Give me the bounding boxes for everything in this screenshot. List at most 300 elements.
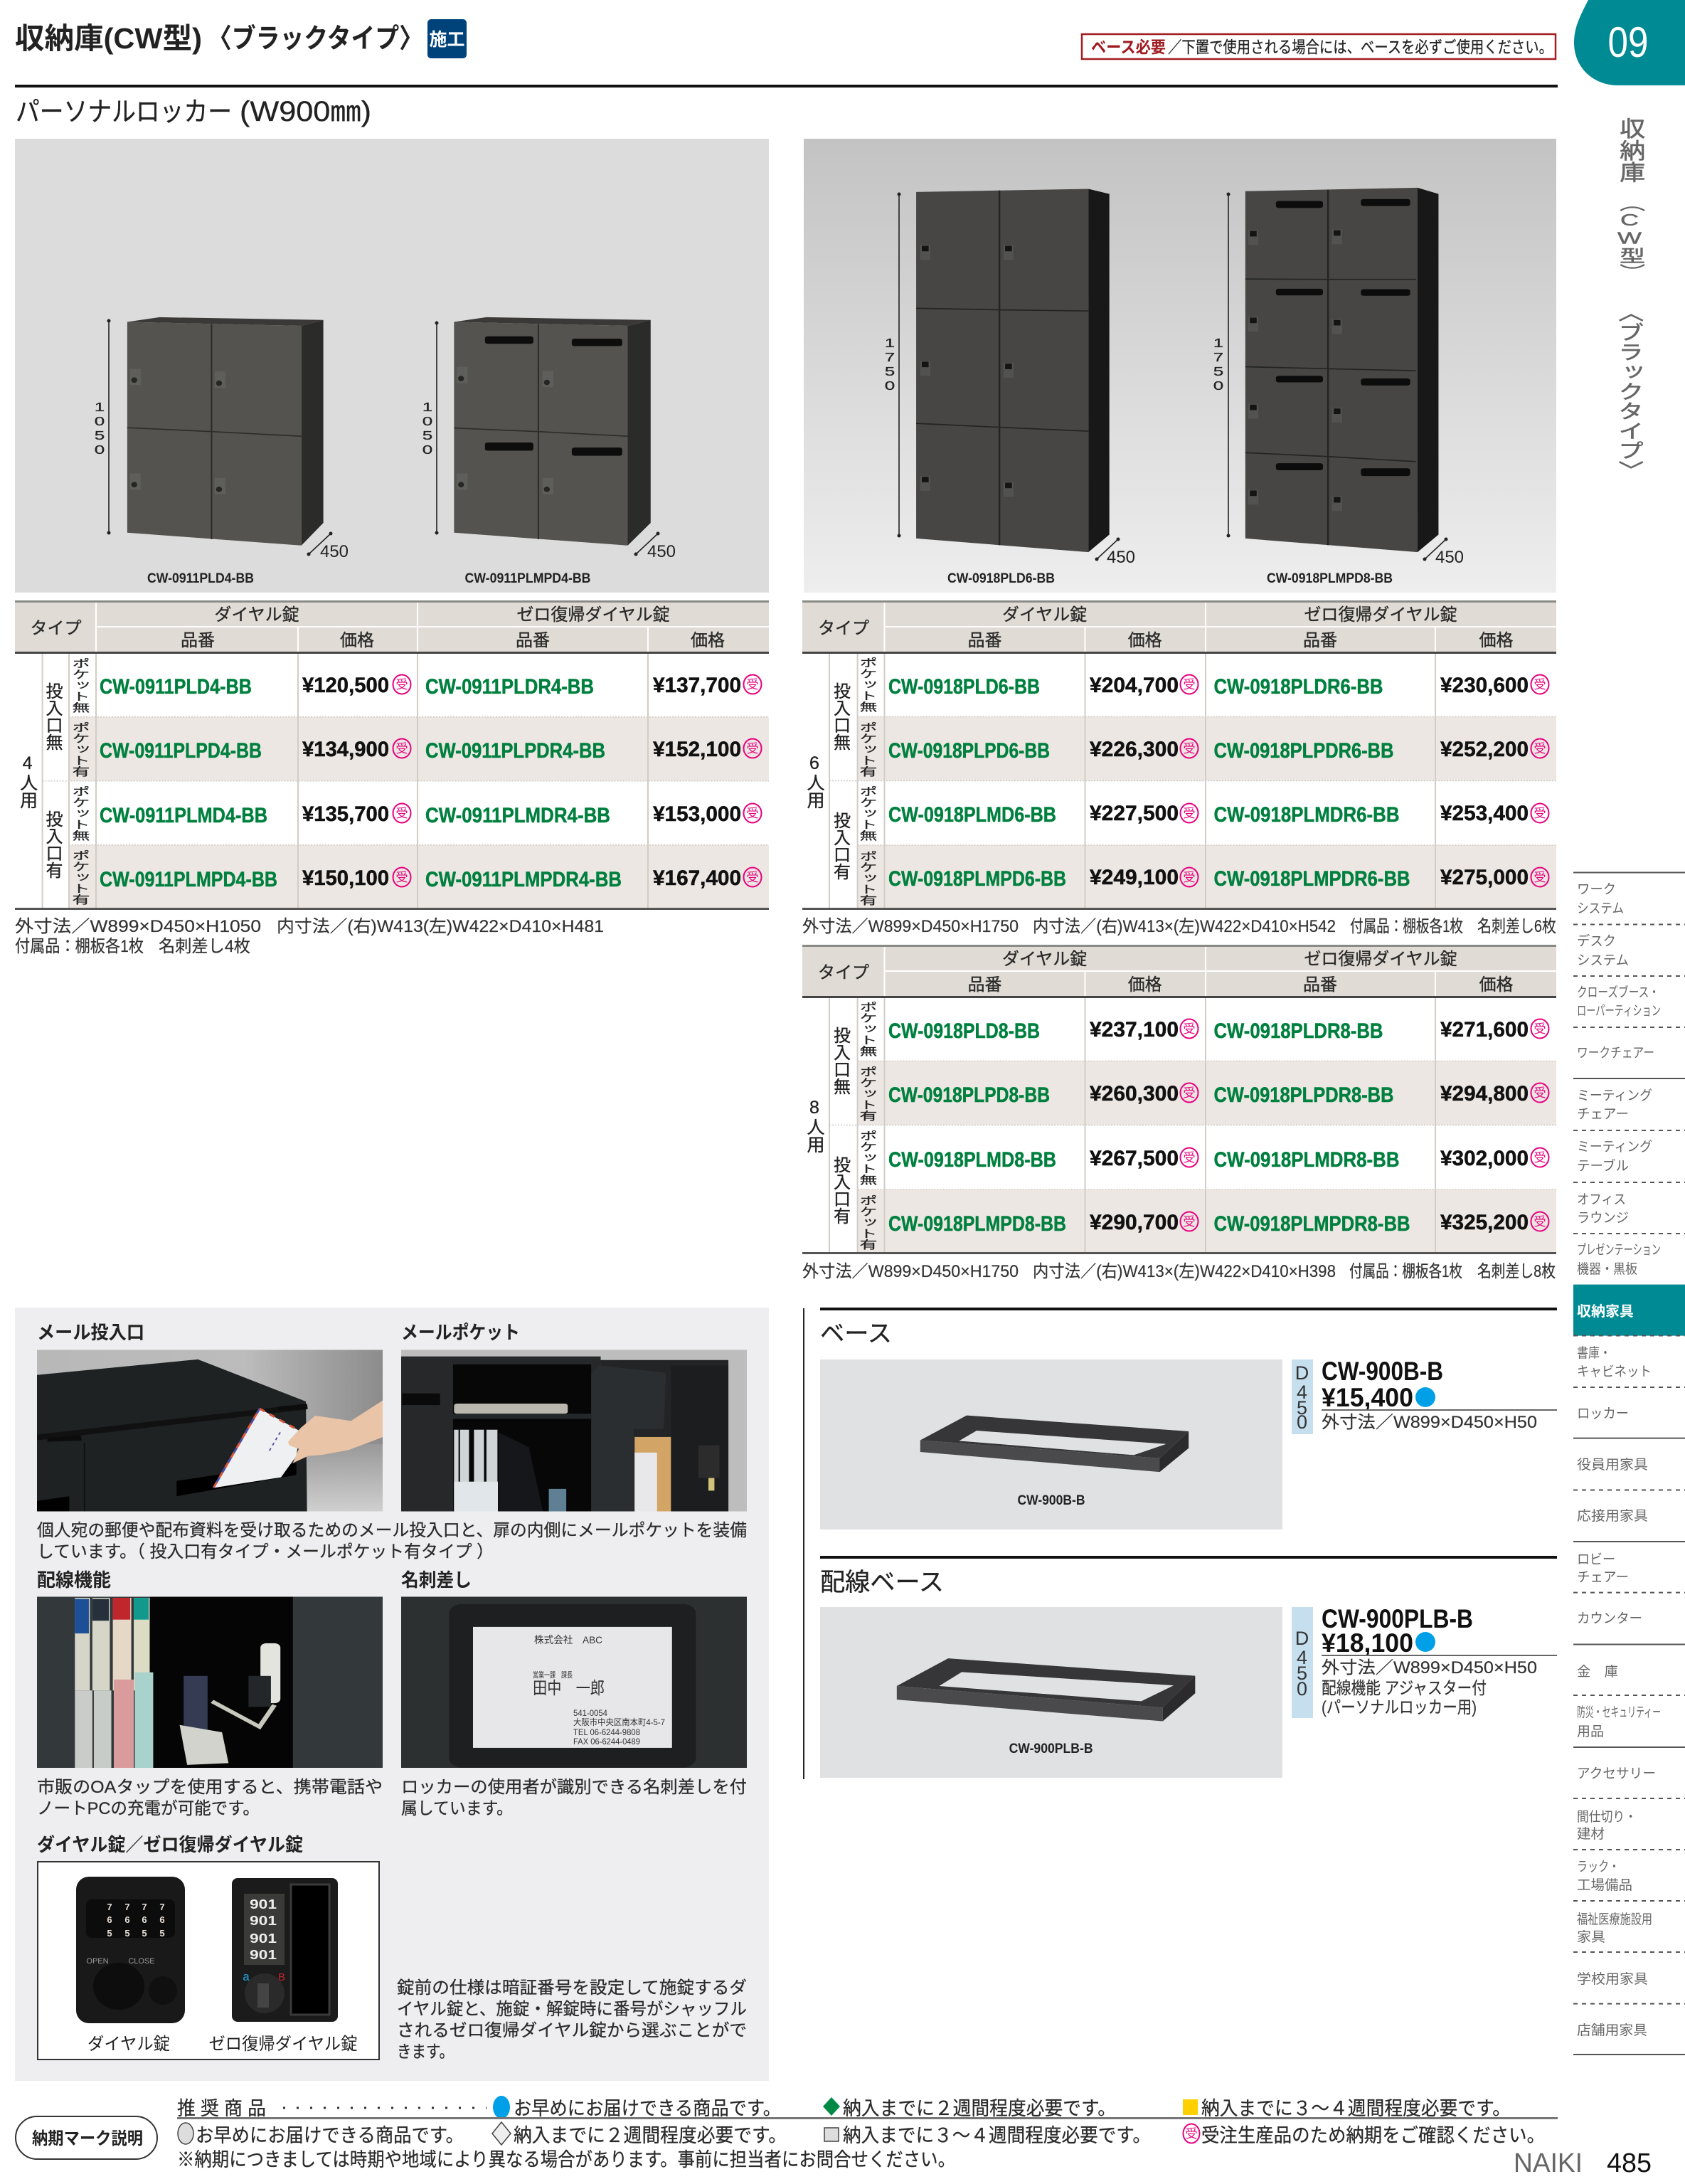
table row labels xyxy=(18,657,90,905)
title: 〈ブラックタイプ〉 xyxy=(208,23,423,54)
panel: 6 and 8 person locker images xyxy=(804,139,1556,593)
text: name card description xyxy=(401,1778,747,1818)
table row labels: ポケット有 xyxy=(856,721,877,777)
panel: 4-person locker images: CW-0911PLD4-BB xyxy=(147,571,254,586)
side navigation: ミーティング xyxy=(1577,1139,1652,1155)
table: 4-person lockers xyxy=(15,600,769,910)
product: CW-900PLB-B: 外寸法／W899×D450×H50 xyxy=(1322,1658,1537,1677)
table rows: ¥230,600 xyxy=(1440,674,1529,697)
product: CW-900B-B xyxy=(1322,1357,1557,1432)
table note: 6-person: 外寸法／W899×D450×H1750 xyxy=(802,917,1019,936)
lock: dial: OPEN xyxy=(86,1957,109,1966)
panel: 4-person locker images: 1050 xyxy=(89,400,110,457)
legend: delivery marks: ※納期につきましては時期や地域により異なる場合があります。事前に担当者にお問合せください。 xyxy=(177,2149,955,2170)
image: CW-900PLB-B: CW-900PLB-B xyxy=(1009,1742,1093,1756)
table row labels: ポケット有 xyxy=(856,1066,877,1121)
table rows: CW-0918PLD8-BB xyxy=(888,1019,1040,1043)
lock: dial: 6 xyxy=(124,1914,130,1925)
table note: 6-person: 内寸法／(右)W413×(左)W422×D410×H542 xyxy=(1033,917,1336,936)
panel: 4-person locker images: 450 xyxy=(320,542,349,561)
table header: 品番 xyxy=(516,631,550,650)
lock: dial xyxy=(76,1877,185,2023)
table row labels: ポケット有 xyxy=(69,849,90,905)
caption: zero-return dial: ゼロ復帰ダイヤル錠 xyxy=(209,2035,357,2054)
lock: zero-return dial: a xyxy=(243,1970,250,1983)
notice: base required xyxy=(1082,34,1556,59)
table header: ゼロ復帰ダイヤル錠 xyxy=(1304,605,1457,625)
lock: zero-return dial: 901 xyxy=(250,1914,277,1928)
table rows: ¥294,800 xyxy=(1440,1082,1529,1106)
table header: ゼロ復帰ダイヤル錠 xyxy=(1304,950,1457,969)
panel: 6 and 8 person locker images: 450 xyxy=(1107,548,1135,567)
panel: 4-person locker images: 1050 xyxy=(417,400,438,457)
side heading: 〈ブラックタイプ〉 xyxy=(1615,302,1644,480)
panel: 6 and 8 person locker images: CW-0918PLMPD8-BB xyxy=(1267,571,1393,586)
table header: 価格 xyxy=(1128,975,1162,995)
table note: 4-person: 内寸法／(右)W413(左)W422×D410×H481 xyxy=(277,917,604,936)
depth label D450: D xyxy=(1295,1628,1309,1649)
table header: タイプ xyxy=(818,963,869,982)
side navigation: ロッカー xyxy=(1577,1406,1629,1421)
mark: blue circle xyxy=(493,2096,510,2119)
table rows: CW-0918PLMD6-BB xyxy=(888,803,1056,827)
table rows: CW-0918PLD6-BB xyxy=(888,675,1040,699)
text: lock description xyxy=(397,1978,747,2062)
text: wiring description: ノートPCの充電が可能です。 xyxy=(37,1799,260,1818)
table note: 6-person xyxy=(802,917,1556,936)
table rows: 受 xyxy=(1533,807,1546,820)
side navigation: ロビー xyxy=(1577,1552,1615,1567)
table rows: ¥226,300 xyxy=(1090,738,1179,761)
text: lock description: イヤル錠と、施錠・解錠時に番号がシャッフル xyxy=(397,2000,747,2019)
table header: 品番 xyxy=(1303,631,1337,650)
table rows: ¥120,500 xyxy=(302,674,389,697)
table header: 品番 xyxy=(1303,975,1337,995)
heading: wiring base: 配線ベース xyxy=(820,1569,944,1596)
table row labels: 4人用 xyxy=(18,753,38,809)
badge: 施工 xyxy=(427,19,467,58)
text: name card description: 属しています。 xyxy=(401,1799,513,1818)
heading: mail slot: メール投入口 xyxy=(37,1322,144,1343)
table rows xyxy=(888,674,1549,891)
depth label D450: D xyxy=(1295,1362,1309,1384)
depth label D450 xyxy=(1292,1359,1313,1434)
name card text xyxy=(533,1634,665,1746)
lock: dial: 5 xyxy=(124,1928,130,1939)
footer brand: NAIKI xyxy=(1514,2148,1583,2178)
side navigation: ラウンジ xyxy=(1577,1211,1629,1226)
legend: delivery marks: 受注生産品のため納期をご確認ください。 xyxy=(1201,2125,1545,2146)
image: CW-900B-B xyxy=(820,1359,1282,1530)
caption: dial: ダイヤル錠 xyxy=(87,2035,170,2054)
table rows: CW-0911PLMPDR4-BB xyxy=(425,868,622,891)
table rows: 受 xyxy=(1533,1086,1546,1100)
legend: delivery marks: お早めにお届けできる商品です。 xyxy=(514,2098,781,2119)
side navigation: 書庫・ xyxy=(1577,1345,1611,1361)
text: wiring description: 市販のOAタップを使用すると、携帯電話や xyxy=(37,1778,383,1797)
table row labels: 8人用 xyxy=(804,1098,825,1153)
legend: delivery marks: 納入までに３～４週間程度必要です。 xyxy=(1201,2098,1511,2119)
side navigation: 店舗用家具 xyxy=(1577,2023,1647,2038)
legend: delivery marks: 納入までに２週間程度必要です。 xyxy=(514,2125,787,2146)
text: name card description: ロッカーの使用者が識別できる名刺差しを付 xyxy=(401,1778,747,1797)
title xyxy=(15,22,423,55)
side navigation: システム xyxy=(1577,953,1629,968)
table rows: 受 xyxy=(1533,678,1546,691)
table rows: 受 xyxy=(747,678,758,691)
table rows: 受 xyxy=(1533,871,1546,884)
table row labels: 投入口有 xyxy=(831,812,851,880)
legend: delivery marks: お早めにお届けできる商品です。 xyxy=(196,2125,464,2146)
table: 8-person lockers xyxy=(802,945,1556,1254)
text: lock description: 錠前の仕様は暗証番号を設定して施錠するダ xyxy=(397,1978,747,1998)
product: CW-900PLB-B: 配線機能 アジャスター付 xyxy=(1322,1679,1487,1698)
table rows: 受 xyxy=(1184,678,1195,691)
notice: base required: ／下置で使用される場合には、ベースを必ずご使用ください。 xyxy=(1168,38,1553,56)
table rows: 受 xyxy=(1533,1022,1546,1036)
table rows: CW-0911PLMDR4-BB xyxy=(425,804,610,827)
table rows: 受 xyxy=(1184,1215,1195,1229)
side navigation: テーブル xyxy=(1577,1157,1629,1174)
title: 収納庫(CW型) xyxy=(15,22,202,55)
panel: features xyxy=(15,1308,769,2081)
depth label D450: 4 xyxy=(1297,1382,1307,1403)
lock: zero-return dial: 901 xyxy=(250,1897,277,1912)
name card text: 大阪市中央区南本町4-5-7 xyxy=(573,1717,665,1727)
mark: made to order stamp: 受 xyxy=(1185,2127,1198,2141)
text: lock description: されるゼロ復帰ダイヤル錠から選ぶことがで xyxy=(397,2021,747,2040)
table rows: CW-0918PLMPD6-BB xyxy=(888,867,1066,891)
table rows: ¥302,000 xyxy=(1440,1147,1529,1170)
section heading: personal locker: パーソナルロッカー xyxy=(16,97,232,127)
side navigation: 建材 xyxy=(1577,1826,1605,1842)
table rows: CW-0918PLMD8-BB xyxy=(888,1148,1056,1172)
table rows: ¥135,700 xyxy=(302,802,389,826)
section heading: personal locker: (W900㎜) xyxy=(240,96,371,127)
locker image CW-0918PLMPD8-BB xyxy=(1245,188,1438,552)
heading: mail pocket: メールポケット xyxy=(401,1322,520,1343)
photo: mail pocket xyxy=(401,1350,747,1511)
table header: ダイヤル錠 xyxy=(214,605,299,625)
table rows: CW-0911PLDR4-BB xyxy=(425,675,594,699)
side navigation: 用品 xyxy=(1577,1724,1604,1739)
table row labels: ポケット無 xyxy=(856,657,877,712)
table rows: CW-0911PLD4-BB xyxy=(100,675,252,699)
table header: タイプ xyxy=(818,619,869,638)
panel: 4-person locker images xyxy=(15,139,769,593)
dimensions xyxy=(109,321,658,554)
image: CW-900B-B: CW-900B-B xyxy=(1017,1493,1085,1508)
side navigation: 応接用家具 xyxy=(1577,1508,1648,1524)
table rows: ¥290,700 xyxy=(1090,1211,1179,1234)
text: mail description: 個人宛の郵便や配布資料を受け取るためのメール投入口と、扉の内側にメールポケットを装備 xyxy=(37,1521,747,1540)
table rows: ¥204,700 xyxy=(1090,674,1179,697)
side navigation: 間仕切り・ xyxy=(1577,1809,1637,1825)
locker image CW-0911PLD4-BB xyxy=(127,317,324,546)
mark: grey circle xyxy=(178,2123,193,2144)
depth label D450: 4 xyxy=(1297,1647,1307,1668)
table rows: ¥260,300 xyxy=(1090,1082,1179,1106)
table row labels: ポケット無 xyxy=(856,1130,877,1185)
mark: yellow square xyxy=(1183,2099,1198,2115)
photo: mail slot xyxy=(37,1350,383,1511)
table rows: 受 xyxy=(747,807,758,820)
legend: delivery marks: 推 奨 商 品 xyxy=(177,2098,266,2119)
table header: 価格 xyxy=(1479,975,1514,995)
table rows: ¥167,400 xyxy=(653,866,741,890)
table row labels xyxy=(804,657,877,906)
table rows: 受 xyxy=(395,807,408,820)
table row labels: ポケット無 xyxy=(856,785,877,841)
chapter tab xyxy=(1574,0,1685,85)
text: wiring description xyxy=(37,1778,383,1818)
table row labels: ポケット無 xyxy=(69,657,90,713)
box: dial locks xyxy=(38,1862,379,2060)
table rows: ¥227,500 xyxy=(1090,802,1179,825)
lock: dial: 5 xyxy=(159,1928,165,1939)
lock: dial: 5 xyxy=(107,1928,112,1939)
table rows: CW-0918PLMPDR8-BB xyxy=(1213,1212,1410,1236)
table: 6-person lockers xyxy=(802,600,1556,910)
table rows: ¥249,100 xyxy=(1090,866,1179,889)
table rows: CW-0918PLDR8-BB xyxy=(1213,1019,1383,1043)
side navigation: 家具 xyxy=(1577,1929,1605,1945)
table row labels: 投入口無 xyxy=(831,1027,851,1095)
table note: 6-person: 付属品：棚板各1枚 xyxy=(1350,917,1463,936)
table header: ダイヤル錠 xyxy=(1002,605,1087,625)
table rows: CW-0918PLMDR6-BB xyxy=(1213,803,1400,827)
table rows: ¥137,700 xyxy=(653,674,741,697)
mark: white diamond xyxy=(492,2122,511,2145)
lock: dial: 6 xyxy=(107,1914,112,1925)
side navigation: 工場備品 xyxy=(1577,1877,1632,1893)
depth label D450: 0 xyxy=(1297,1411,1307,1433)
table rows: CW-0918PLPDR6-BB xyxy=(1213,739,1394,763)
name card text: 営業一課 課長 xyxy=(533,1670,573,1680)
side navigation: カウンター xyxy=(1577,1611,1642,1626)
legend capsule: 納期マーク説明 xyxy=(32,2129,143,2148)
table row labels: ポケット有 xyxy=(69,721,90,777)
text: lock description: きます。 xyxy=(397,2042,454,2062)
locker image CW-0911PLMPD4-BB xyxy=(454,317,651,546)
side navigation: 機器・黒板 xyxy=(1577,1261,1637,1277)
legend: delivery marks xyxy=(16,2096,1558,2170)
name card text: FAX 06-6244-0489 xyxy=(573,1737,640,1746)
side navigation: ワークチェアー xyxy=(1577,1045,1654,1061)
table row labels: 投入口有 xyxy=(43,810,63,879)
table row labels: 投入口有 xyxy=(831,1156,851,1224)
side heading: （CW型） xyxy=(1615,195,1645,280)
text: mail description xyxy=(37,1521,747,1562)
table note: 8-person xyxy=(802,1262,1556,1281)
heading: base: ベース xyxy=(820,1320,892,1347)
table rows: CW-0918PLPD6-BB xyxy=(888,739,1050,763)
lock: zero-return dial: 901 xyxy=(250,1931,277,1946)
side navigation: ラック・ xyxy=(1577,1859,1620,1875)
side heading xyxy=(1615,117,1645,480)
heading: dial locks: ダイヤル錠／ゼロ復帰ダイヤル錠 xyxy=(37,1834,303,1855)
table row labels: ポケット無 xyxy=(856,1001,877,1056)
side navigation: キャビネット xyxy=(1577,1364,1652,1379)
depth label D450: 0 xyxy=(1297,1678,1307,1700)
table rows: ¥150,100 xyxy=(302,866,389,890)
table rows xyxy=(888,1018,1549,1236)
lock: dial: 7 xyxy=(107,1902,112,1912)
heading: wiring: 配線機能 xyxy=(37,1569,111,1591)
product: CW-900B-B: CW-900B-B xyxy=(1322,1357,1443,1386)
product: CW-900B-B: 外寸法／W899×D450×H50 xyxy=(1322,1413,1537,1432)
product: CW-900PLB-B: ¥18,100 xyxy=(1322,1628,1413,1658)
panel: 4-person locker images: 450 xyxy=(647,542,676,561)
table note: 4-person: 外寸法／W899×D450×H1050 xyxy=(15,917,261,936)
table rows: 受 xyxy=(1184,1086,1195,1100)
lock: dial: CLOSE xyxy=(128,1957,155,1966)
side navigation: 福祉医療施設用 xyxy=(1577,1912,1652,1927)
table header: 価格 xyxy=(1479,631,1514,650)
table rows: ¥253,400 xyxy=(1440,802,1529,825)
text: mail description: しています。（ 投入口有タイプ・メールポケット有タイプ ） xyxy=(37,1542,494,1562)
dimensions xyxy=(899,194,1446,559)
table rows: CW-0911PLPDR4-BB xyxy=(425,739,605,763)
table rows: 受 xyxy=(1184,807,1195,820)
table rows: ¥325,200 xyxy=(1440,1211,1529,1234)
panel: 4-person locker images: CW-0911PLMPD4-BB xyxy=(465,571,590,586)
table rows: 受 xyxy=(1184,871,1195,884)
name card text: 541-0054 xyxy=(573,1708,607,1718)
table row labels: ポケット有 xyxy=(856,1194,877,1250)
section heading: personal locker xyxy=(16,96,371,127)
product: CW-900PLB-B: CW-900PLB-B xyxy=(1322,1604,1473,1633)
table rows: CW-0918PLMPD8-BB xyxy=(888,1212,1066,1236)
section: base xyxy=(820,1308,1557,1530)
table header xyxy=(818,950,1514,995)
table header: 価格 xyxy=(691,631,725,650)
table row labels: ポケット有 xyxy=(856,850,877,906)
product: CW-900PLB-B: (パーソナルロッカー用) xyxy=(1322,1698,1477,1717)
mark: grey square xyxy=(824,2128,839,2141)
table rows: 受 xyxy=(1184,742,1195,756)
side navigation: 収納家具 xyxy=(1577,1303,1634,1320)
table header: タイプ xyxy=(30,619,81,638)
table row labels: 投入口無 xyxy=(831,682,851,751)
table rows: 受 xyxy=(395,742,408,756)
page number: 485 xyxy=(1607,2148,1652,2178)
panel: 6 and 8 person locker images: 450 xyxy=(1435,548,1464,567)
table rows: ¥237,100 xyxy=(1090,1018,1179,1041)
table note: 4-person xyxy=(15,917,604,956)
table header: 品番 xyxy=(967,975,1001,995)
table header: 品番 xyxy=(967,631,1001,650)
table header xyxy=(30,605,725,650)
table rows: CW-0918PLPD8-BB xyxy=(888,1083,1050,1107)
table note: 4-person: 名刺差し4枚 xyxy=(159,937,250,956)
table note: 4-person: 付属品：棚板各1枚 xyxy=(15,937,144,956)
depth label D450 xyxy=(1292,1607,1313,1718)
locker image CW-0918PLD6-BB xyxy=(916,189,1110,552)
table rows: ¥267,500 xyxy=(1090,1147,1179,1170)
side navigation: 金 庫 xyxy=(1577,1664,1618,1680)
table rows: CW-0918PLDR6-BB xyxy=(1213,675,1383,699)
table note: 8-person: 外寸法／W899×D450×H1750 xyxy=(802,1262,1019,1281)
chapter tab: 09 xyxy=(1607,18,1649,66)
side navigation: クローズブース・ xyxy=(1577,984,1659,1000)
product: CW-900B-B: ¥15,400 xyxy=(1322,1383,1413,1412)
depth label D450: 5 xyxy=(1297,1663,1307,1684)
table row labels: ポケット無 xyxy=(69,785,90,841)
side navigation: ミーティング xyxy=(1577,1088,1652,1103)
side navigation: 役員用家具 xyxy=(1577,1457,1648,1473)
legend: delivery marks: 納入までに３～４週間程度必要です。 xyxy=(843,2125,1151,2146)
name card text: TEL 06-6244-9808 xyxy=(573,1727,640,1737)
table rows xyxy=(100,674,761,891)
table note: 8-person: 付属品：棚板各1枚 xyxy=(1349,1262,1462,1281)
panel: 6 and 8 person locker images: 1750 xyxy=(879,336,900,393)
lock: zero-return dial xyxy=(232,1878,338,2022)
divider column xyxy=(803,1308,804,1779)
table header: 品番 xyxy=(181,631,215,650)
table rows: CW-0918PLPDR8-BB xyxy=(1213,1083,1394,1107)
name card text: 田中 一郎 xyxy=(533,1679,605,1698)
legend capsule xyxy=(16,2116,157,2159)
heading: name card holder: 名刺差し xyxy=(401,1569,472,1591)
badge: 施工: 施工 xyxy=(430,30,465,50)
lock: zero-return dial: 901 xyxy=(250,1948,277,1962)
table header: ゼロ復帰ダイヤル錠 xyxy=(516,605,670,625)
side navigation: ワーク xyxy=(1577,881,1616,897)
table rows: 受 xyxy=(395,871,408,884)
depth label D450: 5 xyxy=(1297,1397,1307,1419)
panel: 6 and 8 person locker images: 1750 xyxy=(1208,336,1229,393)
table rows: 受 xyxy=(747,742,758,756)
table header: 価格 xyxy=(1128,631,1162,650)
table rows: 受 xyxy=(395,678,408,691)
table row labels: 投入口無 xyxy=(43,682,63,751)
lock: zero-return dial: B xyxy=(278,1971,285,1983)
side navigation: オフィス xyxy=(1577,1192,1626,1207)
table rows: ¥275,000 xyxy=(1440,866,1529,889)
table rows: CW-0911PLMD4-BB xyxy=(100,804,267,827)
table rows: 受 xyxy=(747,871,758,884)
section: wiring base xyxy=(820,1556,1557,1778)
table rows: CW-0918PLMDR8-BB xyxy=(1213,1148,1400,1172)
table header xyxy=(818,605,1514,650)
side navigation xyxy=(1573,872,1685,2055)
product: CW-900PLB-B xyxy=(1322,1604,1557,1717)
panel: 6 and 8 person locker images: CW-0918PLD6-BB xyxy=(947,571,1055,586)
table row labels: 6人用 xyxy=(804,753,825,809)
side navigation: 学校用家具 xyxy=(1577,1971,1648,1987)
mark: green diamond xyxy=(823,2097,840,2116)
table rows: ¥153,000 xyxy=(653,802,741,826)
table note: 8-person: 内寸法／(右)W413×(左)W422×D410×H398 xyxy=(1033,1262,1336,1281)
table header: ダイヤル錠 xyxy=(1002,950,1087,969)
side navigation: アクセサリー xyxy=(1577,1766,1656,1781)
table rows: 受 xyxy=(1184,1151,1195,1165)
side navigation: チェアー xyxy=(1577,1107,1629,1122)
photo: name card holder xyxy=(401,1596,747,1768)
lock: dial: 7 xyxy=(159,1902,165,1912)
table rows: 受 xyxy=(1533,1215,1546,1229)
mark: made to order stamp xyxy=(1184,2124,1199,2143)
table note: 6-person: 名刺差し6枚 xyxy=(1477,917,1556,936)
table rows: CW-0918PLMPDR6-BB xyxy=(1213,867,1410,891)
lock: dial: 6 xyxy=(159,1914,165,1925)
side navigation: システム xyxy=(1577,901,1624,916)
table rows: 受 xyxy=(1184,1022,1195,1036)
lock: dial: 6 xyxy=(142,1914,147,1925)
table rows: ¥134,900 xyxy=(302,738,389,761)
lock: dial: 5 xyxy=(142,1928,147,1939)
